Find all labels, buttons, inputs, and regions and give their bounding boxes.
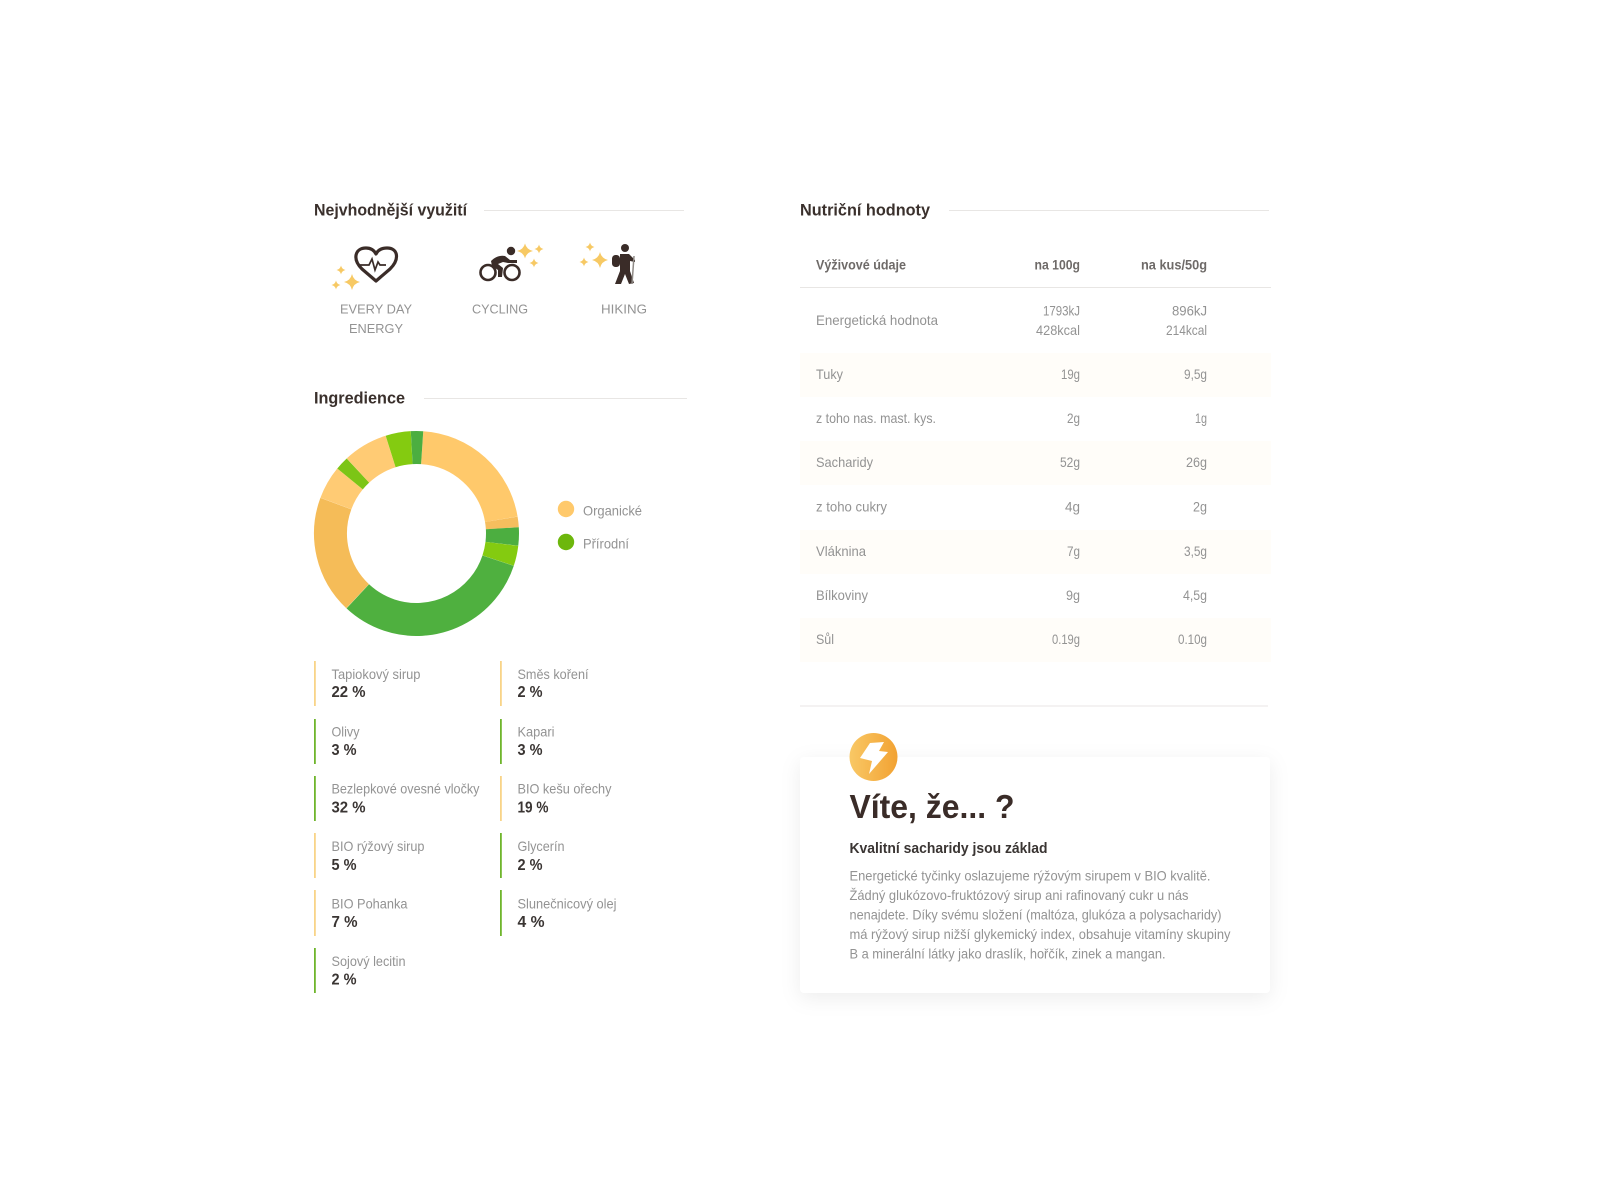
row: Tuky (800, 353, 1271, 397)
row: Tuky: Tuky (816, 366, 843, 382)
row: Energetická hodnota: 896kJ (1172, 302, 1207, 318)
row: Sůl: 0.19g (1052, 631, 1080, 647)
label: every day energy: EVERY DAY (340, 302, 412, 316)
card background (800, 757, 1270, 993)
icon: lightning badge (850, 733, 898, 781)
row: Tuky: 19g (1061, 366, 1080, 382)
table header: Výživové údaje (816, 258, 906, 272)
row: Sacharidy: Sacharidy (816, 454, 873, 470)
ingredient: Slunečnicový olej: Slunečnicový olej (518, 896, 616, 912)
card subtitle: Kvalitní sacharidy jsou základ (850, 840, 1048, 857)
table header: na 100g (1034, 258, 1080, 272)
heading: Nejvhodnější využití: Nejvhodnější využití (314, 202, 468, 220)
card paragraph (850, 868, 1230, 962)
row: z toho nas. mast. kys. (816, 410, 1207, 426)
row: z toho cukry: 4g (1065, 498, 1080, 514)
ingredient: Směs koření (500, 661, 589, 706)
ingredient: Sojový lecitin (314, 948, 406, 993)
table header (800, 258, 1271, 288)
legend: Organické (583, 502, 642, 518)
ingredient: BIO Pohanka: BIO Pohanka (332, 896, 408, 912)
ingredient: Směs koření: Směs koření (518, 666, 589, 682)
ingredient: Sojový lecitin: Sojový lecitin (332, 953, 406, 969)
donut chart (295, 412, 538, 655)
label: every day energy: ENERGY (349, 321, 403, 336)
row: Energetická hodnota: 1793kJ (1043, 302, 1080, 318)
row: Vláknina: 7g (1067, 543, 1080, 559)
table: nutrition values (800, 258, 1271, 662)
ingredient: Směs koření: 2 % (518, 684, 543, 701)
row: Energetická hodnota: Energetická hodnota (816, 312, 938, 328)
row: z toho cukry (816, 498, 1207, 514)
ingredient: Olivy: Olivy (332, 724, 360, 740)
row: Bílkoviny (816, 587, 1207, 603)
row: z toho cukry: z toho cukry (816, 498, 887, 514)
legend (558, 501, 642, 552)
ingredient: BIO kešu ořechy (500, 776, 612, 821)
card title: Víte, že... ? (850, 788, 1014, 825)
ingredient: BIO rýžový sirup: BIO rýžový sirup (332, 838, 425, 854)
label: hiking: HIKING (601, 302, 647, 316)
ingredient: Slunečnicový olej (500, 890, 616, 936)
row: Vláknina: 3,5g (1184, 543, 1207, 559)
label: cycling: CYCLING (472, 302, 528, 316)
row: Sacharidy: 26g (1186, 454, 1207, 470)
ingredient: Olivy: 3 % (332, 742, 357, 759)
ingredient: Glycerín: 2 % (518, 857, 543, 874)
ingredient: Kapari: 3 % (518, 742, 543, 759)
row: z toho nas. mast. kys.: 2g (1067, 410, 1080, 426)
ingredient: BIO rýžový sirup: 5 % (332, 857, 357, 874)
heading: Nutriční hodnoty: Nutriční hodnoty (800, 202, 931, 220)
row: Energetická hodnota: 428kcal (1036, 322, 1080, 338)
row: Bílkoviny: 4,5g (1183, 587, 1207, 603)
row: z toho nas. mast. kys.: z toho nas. mast. kys. (816, 410, 936, 426)
row: Sacharidy (800, 441, 1271, 485)
table header: na kus/50g (1141, 258, 1207, 272)
row: Sůl: 0.10g (1178, 631, 1207, 647)
row: Energetická hodnota: 214kcal (1166, 322, 1207, 338)
row: Sůl: Sůl (816, 631, 834, 647)
row: z toho cukry: 2g (1193, 498, 1207, 514)
row: Sůl (800, 618, 1271, 662)
panel: did you know card (800, 733, 1270, 993)
ingredient: Glycerín: Glycerín (518, 838, 564, 854)
card paragraph: nenajdete. Díky svému složení (maltóza, glukóza a polysacharidy) (850, 906, 1222, 922)
heading: Ingredience: Ingredience (314, 390, 405, 408)
ingredient: Bezlepkové ovesné vločky (314, 776, 480, 821)
row: Energetická hodnota (816, 302, 1207, 338)
card paragraph: Žádný glukózovo-fruktózový sirup ani rafinovaný cukr u nás (850, 887, 1188, 903)
card paragraph: má rýžový sirup nižší glykemický index, obsahuje vitamíny skupiny (850, 926, 1230, 942)
ingredient: Glycerín (500, 833, 564, 878)
row: Tuky: 9,5g (1184, 366, 1207, 382)
ingredient: Bezlepkové ovesné vločky: Bezlepkové ovesné vločky (332, 780, 480, 796)
ingredient: Olivy (314, 719, 360, 764)
ingredient: Tapiokový sirup: Tapiokový sirup (332, 666, 421, 682)
icon: every day energy heart (332, 248, 396, 290)
ingredient: Bezlepkové ovesné vločky: 32 % (332, 800, 366, 816)
ingredient: BIO kešu ořechy: 19 % (518, 800, 549, 816)
ingredient: BIO Pohanka: 7 % (332, 914, 358, 931)
legend: Přírodní (583, 536, 629, 552)
ingredient: Sojový lecitin: 2 % (332, 972, 357, 988)
ingredient: Tapiokový sirup (314, 661, 421, 706)
ingredient: Kapari: Kapari (518, 724, 554, 740)
row: Sacharidy: 52g (1060, 454, 1080, 470)
icon: hiking (580, 242, 635, 284)
row: Vláknina (800, 530, 1271, 574)
ingredient: Kapari (500, 719, 554, 764)
ingredient: Slunečnicový olej: 4 % (518, 914, 545, 931)
ingredient: BIO kešu ořechy: BIO kešu ořechy (518, 780, 612, 796)
card paragraph: B a minerální látky jako draslík, hořčík, zinek a mangan. (850, 946, 1166, 962)
ingredient: BIO Pohanka (314, 890, 408, 936)
row: Bílkoviny: Bílkoviny (816, 587, 868, 603)
row: z toho nas. mast. kys.: 1g (1195, 410, 1207, 426)
card paragraph: Energetické tyčinky oslazujeme rýžovým sirupem v BIO kvalitě. (850, 868, 1210, 884)
ingredient: Tapiokový sirup: 22 % (332, 684, 366, 701)
row: Vláknina: Vláknina (816, 543, 866, 559)
ingredient: BIO rýžový sirup (314, 833, 425, 878)
icon: cycling (480, 244, 544, 280)
label: every day energy (340, 302, 412, 336)
row: Bílkoviny: 9g (1066, 587, 1080, 603)
